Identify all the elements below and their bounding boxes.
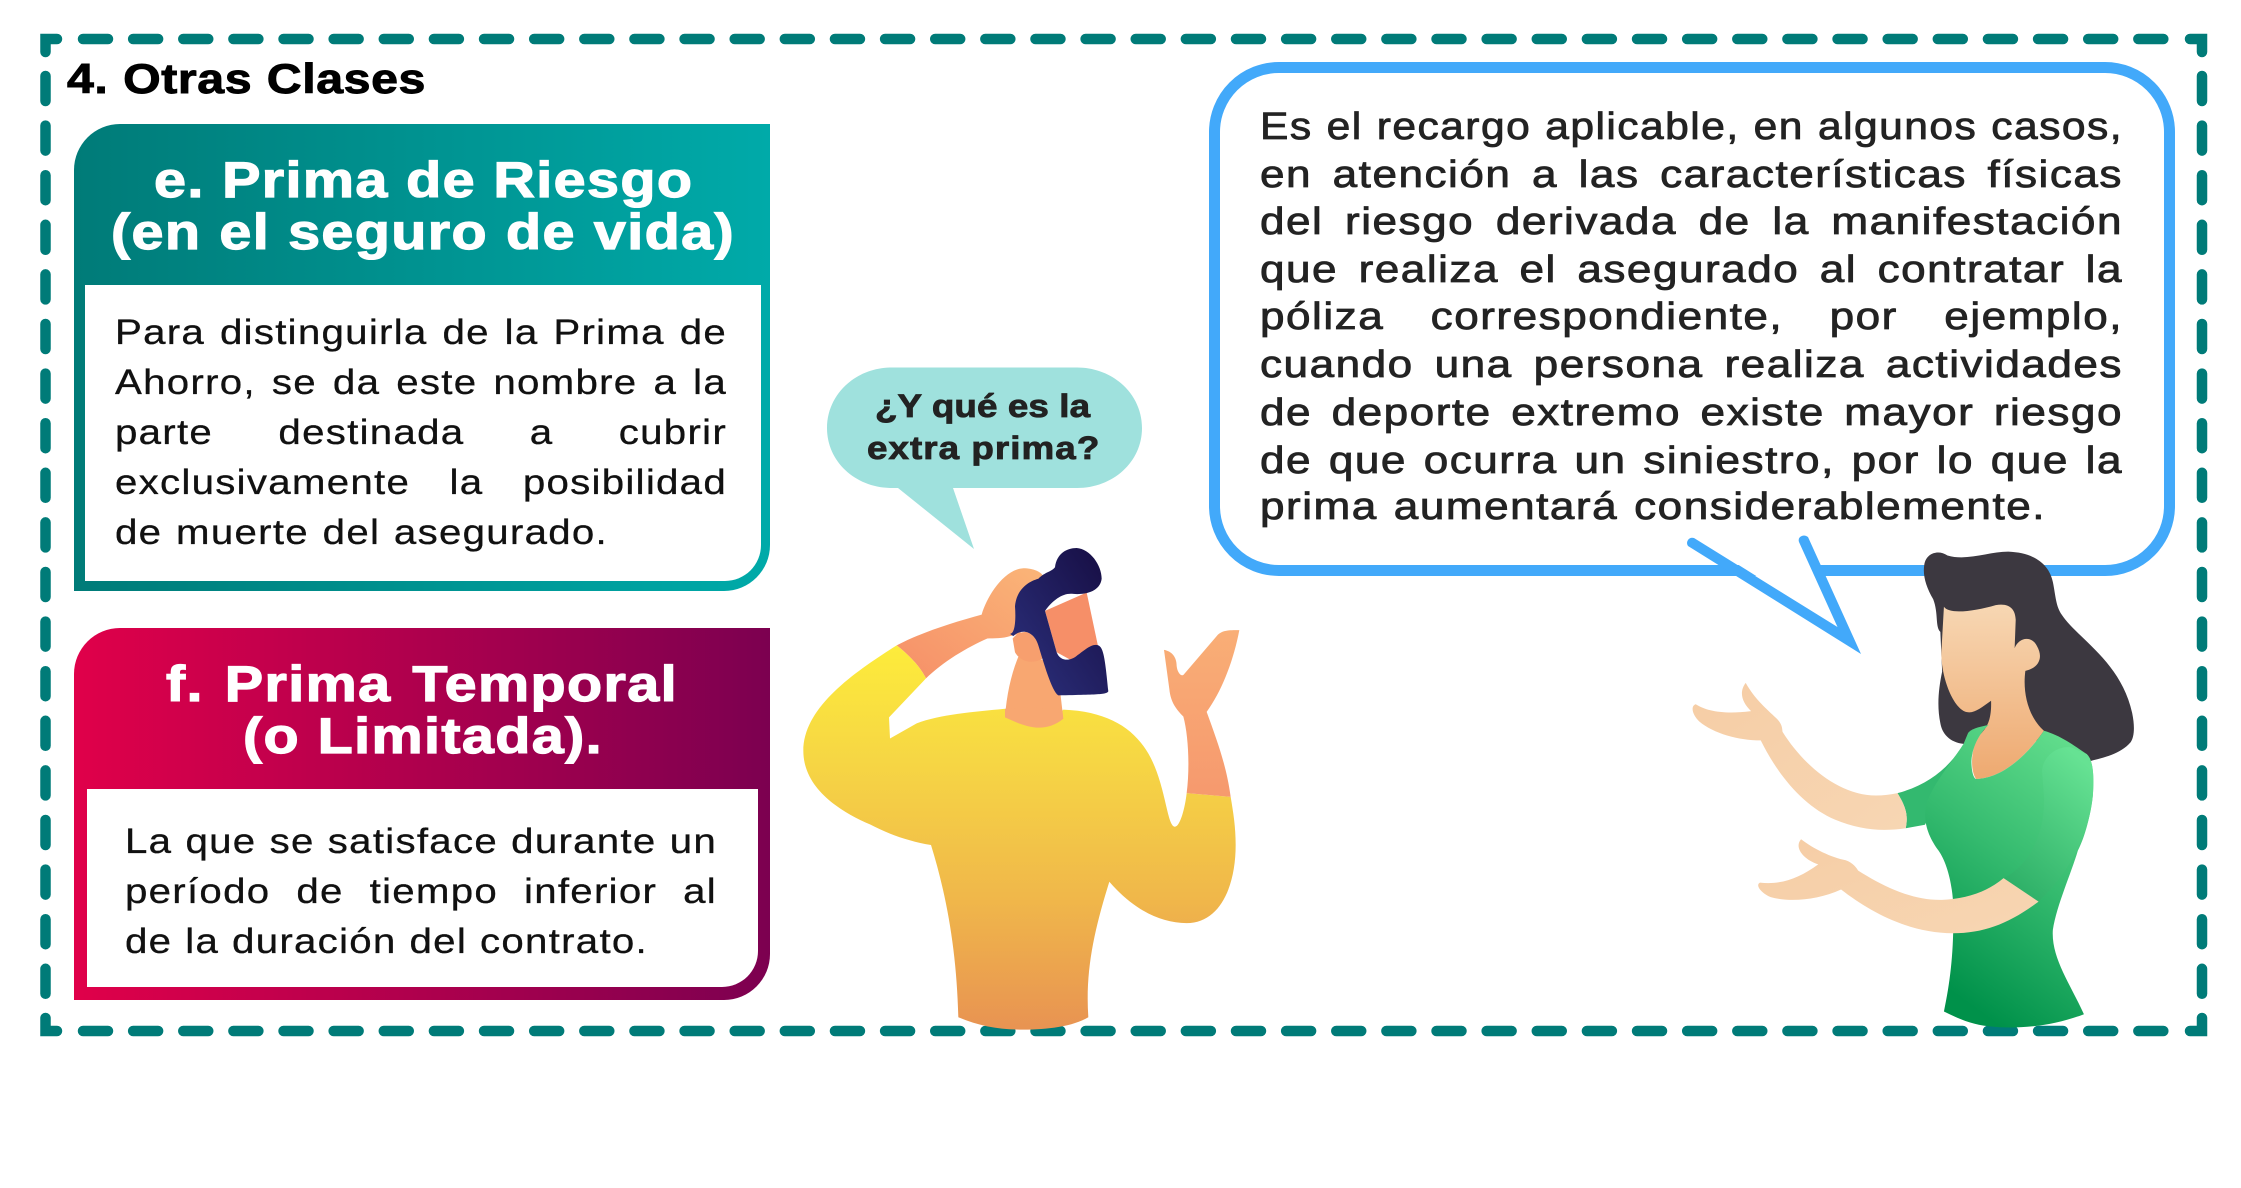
speech bubble: extra prima explanation: del riesgo derivada de la manifestación: [1260, 201, 2123, 243]
speech bubble: extra prima explanation: en atención a las características físicas: [1260, 154, 2123, 196]
panel text: Prima Temporal definition: La que se satisface durante un: [125, 822, 717, 861]
panel heading: Prima Temporal: [166, 656, 678, 764]
speech bubble: extra prima explanation: prima aumentará considerablemente.: [1260, 486, 2046, 528]
speech bubble: extra prima explanation: que realiza el asegurado al contratar la: [1260, 249, 2123, 291]
panel text: Prima de Riesgo definition: Ahorro, se da este nombre a la: [115, 363, 727, 402]
speech bubble: ¿Y qué es la extra prima?: [827, 368, 1142, 549]
speech bubble: ¿Y qué es la extra prima?: extra prima?: [867, 431, 1099, 466]
panel text: Prima Temporal definition: [87, 789, 758, 987]
figure: woman explaining: [1693, 552, 2134, 1028]
panel heading: Prima Temporal: f. Prima Temporal: [166, 656, 678, 712]
panel text: Prima de Riesgo definition: [85, 285, 761, 581]
panel: e. Prima de Riesgo: [74, 124, 770, 591]
panel text: Prima Temporal definition: período de tiempo inferior al: [125, 872, 717, 911]
speech bubble tail: blue: [1687, 536, 1861, 654]
panel heading: Prima Temporal: (o Limitada).: [243, 708, 603, 764]
panel heading: Prima de Riesgo: e. Prima de Riesgo: [154, 152, 693, 208]
figure: man scratching head: [803, 548, 1239, 1030]
panel heading: Prima de Riesgo: (en el seguro de vida): [111, 204, 735, 260]
speech bubble: extra prima explanation: [1209, 62, 2175, 576]
panel text: Prima de Riesgo definition: de muerte del asegurado.: [115, 513, 608, 552]
panel text: Prima Temporal definition: de la duración del contrato.: [125, 922, 648, 961]
panel text: Prima de Riesgo definition: exclusivamente la posibilidad: [115, 463, 727, 502]
panel heading: Prima de Riesgo: [111, 152, 735, 260]
panel text: Prima de Riesgo definition: parte destinada a cubrir: [115, 413, 727, 452]
panel: f. Prima Temporal: [74, 628, 770, 1000]
speech bubble: extra prima explanation: póliza correspondiente, por ejemplo,: [1260, 296, 2123, 338]
speech bubble: extra prima explanation: Es el recargo aplicable, en algunos casos,: [1260, 106, 2123, 148]
heading: 4. Otras Clases: 4. Otras Clases: [67, 55, 426, 102]
speech bubble: ¿Y qué es la extra prima?: ¿Y qué es la: [875, 389, 1091, 424]
panel text: Prima de Riesgo definition: Para distinguirla de la Prima de: [115, 313, 727, 352]
speech bubble: extra prima explanation: cuando una persona realiza actividades: [1260, 344, 2123, 386]
speech bubble: extra prima explanation: de deporte extremo existe mayor riesgo: [1260, 392, 2123, 434]
speech bubble: extra prima explanation: de que ocurra un siniestro, por lo que la: [1260, 440, 2123, 482]
